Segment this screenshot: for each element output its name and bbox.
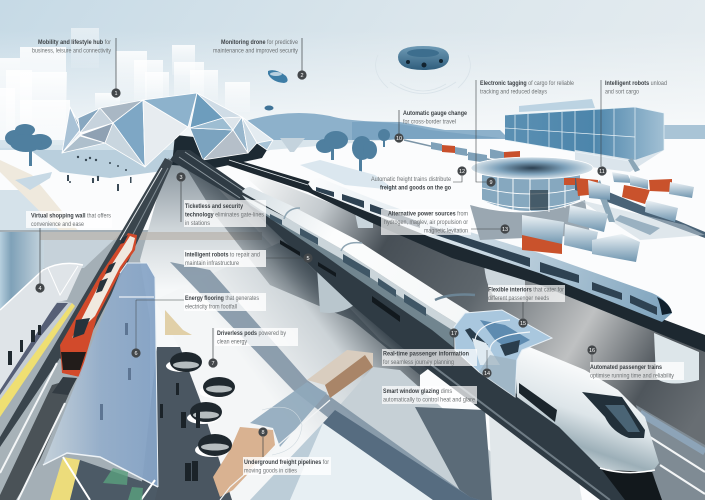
containers	[522, 172, 694, 262]
callout 15: flexible interiors: different passenger needs	[488, 295, 549, 302]
callout 2: monitoring drone: 2	[300, 73, 304, 79]
callout 3: ticketless: Ticketless and security	[185, 203, 243, 210]
freight pipeline	[213, 350, 373, 500]
roof	[242, 187, 519, 362]
shopping wall	[0, 263, 83, 390]
plaza shadow	[30, 150, 270, 178]
callout 5: intelligent robots repair: Intelligent robots to repair and	[185, 252, 260, 258]
windows	[270, 214, 426, 316]
callout 11: cargo robots: Intelligent robots unload	[605, 80, 667, 87]
callout 13: power sources: 13	[502, 227, 508, 233]
cut-away interior	[435, 295, 552, 397]
pod	[166, 352, 202, 372]
energy flooring tan marks	[165, 310, 192, 335]
funnel kiosk	[280, 138, 305, 152]
tree center	[352, 136, 377, 175]
callout 5: intelligent robots repair	[184, 250, 313, 267]
left rail track	[0, 158, 173, 500]
lifestyle hub tunnel	[172, 135, 270, 168]
distant hills	[246, 113, 705, 140]
callout 17: marker	[449, 328, 459, 349]
callout 10: gauge change: 10	[396, 136, 402, 142]
lower floor panels	[250, 367, 582, 500]
tree far	[378, 129, 390, 147]
train shadow patch	[52, 377, 77, 395]
callout 11: cargo robots	[597, 80, 667, 176]
callout 12: freight trains	[371, 166, 467, 192]
callout 2: monitoring drone: Monitoring drone for predictive	[221, 39, 298, 46]
crowd	[67, 156, 132, 191]
monitoring drone large	[376, 46, 470, 94]
side highlight	[242, 195, 519, 372]
big train pillar	[317, 268, 357, 313]
lifestyle hub	[62, 93, 273, 167]
train nose	[515, 341, 659, 472]
monitoring drone distant	[264, 106, 274, 110]
centre floor	[155, 240, 420, 500]
body side	[242, 195, 519, 395]
ground shadows under trees	[300, 160, 395, 190]
callout 3: ticketless	[176, 172, 266, 227]
callout 1: mobility hub: 1	[114, 91, 118, 97]
callout 12: freight trains: Automatic freight trains distribute	[371, 176, 451, 183]
callout 15: flexible interiors: Flexible interiors that cater for	[488, 286, 564, 294]
callout 1: mobility hub: Mobility and lifestyle hub for	[38, 39, 111, 46]
callout 9: electronic tagging	[476, 80, 574, 187]
lower right rails	[636, 405, 705, 500]
container yard	[522, 158, 705, 262]
callout 14: real-time information: Real-time passenger information	[383, 350, 469, 358]
callout 16: automated trains: Automated passenger trains	[590, 364, 662, 371]
callout 3: ticketless: technology eliminates gate-lines	[185, 212, 264, 218]
tree left	[5, 124, 52, 166]
callout 6: energy flooring: electricity from footfall	[185, 304, 237, 310]
callout 12: freight trains: 12	[459, 169, 465, 175]
circular freight terminal	[470, 157, 593, 240]
callout 15: flexible interiors: 15	[520, 321, 526, 327]
callout 7: driverless pods	[208, 328, 298, 368]
smart window glazing: Smart window glazing dims	[383, 388, 452, 395]
callout 13: power sources: magnetic levitation	[424, 228, 468, 234]
callout 2: monitoring drone	[213, 38, 307, 80]
roof rings	[284, 208, 300, 219]
pod	[195, 434, 232, 457]
upper train	[308, 178, 672, 322]
left district base	[0, 230, 150, 500]
callout 7: driverless pods: 7	[211, 361, 215, 367]
centre concourse strip	[140, 158, 285, 350]
blue block upper left	[0, 232, 44, 312]
callout 1: mobility hub	[32, 38, 121, 98]
callout 5: intelligent robots repair: 5	[306, 256, 310, 262]
pedestrians	[160, 383, 200, 481]
callout 14: real-time information: 14	[484, 371, 490, 377]
callout 10: gauge change: for cross-border travel	[403, 118, 456, 126]
callout 10: gauge change	[394, 110, 467, 143]
callout 13: power sources: hydrogen, maglev, air propulsion or	[384, 219, 468, 226]
monitoring drone small	[268, 70, 288, 83]
callout 15: flexible interiors	[488, 285, 565, 328]
callout 8: freight pipelines: Underground freight pipelines for	[244, 459, 329, 466]
callout 3: ticketless: in stations	[185, 220, 210, 227]
crossover bridge	[40, 232, 262, 240]
glass tube	[43, 263, 158, 500]
red train	[60, 233, 137, 377]
callout 9: electronic tagging: tracking and reduced delays	[480, 88, 547, 96]
callout 5: intelligent robots repair: maintain infrastructure	[185, 260, 239, 267]
callout 6: energy flooring: Energy flooring that generates	[185, 295, 259, 302]
callout 2: monitoring drone: maintenance and improved security	[213, 48, 299, 54]
big train guideway	[170, 150, 640, 500]
smart window glazing: automatically to control heat and glare	[383, 396, 475, 404]
callout 4: shopping wall: Virtual shopping wall that offers	[31, 212, 111, 220]
callout 7: driverless pods: Driverless pods powered by	[217, 330, 287, 337]
callout 13: power sources: Alternative power sources from	[388, 210, 468, 218]
callout 17: marker: 17	[451, 331, 457, 337]
pillars	[355, 213, 699, 384]
distant freight train	[404, 140, 520, 163]
tree right	[316, 131, 348, 160]
callout 12: freight trains: freight and goods on the go	[380, 184, 451, 192]
callout 4: shopping wall: 4	[38, 286, 42, 292]
trees	[5, 124, 390, 175]
callout 16: automated trains: 16	[589, 348, 595, 354]
callout 14: real-time information: for seamless journey planning	[383, 359, 454, 366]
callout 10: gauge change: Automatic gauge change	[403, 110, 467, 117]
callout 16: automated trains	[587, 345, 684, 380]
driverless pods	[166, 352, 235, 457]
callout 8: freight pipelines	[243, 427, 331, 475]
callout 3: ticketless: 3	[179, 175, 183, 181]
callout 1: mobility hub: business, leisure and connectivity	[32, 48, 112, 54]
callout 16: automated trains: optimise running time and reliability	[590, 372, 675, 380]
callout 7: driverless pods: clean energy	[217, 338, 248, 346]
callout 4: shopping wall: convenience and ease	[31, 221, 84, 228]
robot arm	[595, 180, 615, 222]
callout 13: power sources	[381, 209, 510, 235]
callout 14: real-time information	[382, 349, 492, 378]
diagonal blue band	[170, 262, 480, 500]
ground	[0, 139, 705, 500]
pod pavement	[140, 347, 232, 500]
callout 6: energy flooring: 6	[134, 351, 138, 357]
callout 4: shopping wall	[26, 211, 112, 293]
callout 6: energy flooring	[131, 293, 266, 358]
callout 11: cargo robots: and sort cargo	[605, 88, 639, 96]
upper guideway	[227, 157, 705, 352]
city skyline	[0, 28, 250, 157]
dark corridor	[178, 155, 460, 375]
callout 11: cargo robots: 11	[599, 169, 605, 175]
callout 9: electronic tagging: Electronic tagging of cargo for reliable	[480, 80, 574, 87]
area between guideways	[232, 165, 705, 500]
callout 8: freight pipelines: 8	[261, 430, 265, 436]
glass cargo building	[505, 99, 664, 172]
big train	[242, 187, 662, 500]
callout 9: electronic tagging: 9	[489, 180, 493, 186]
callout 8: freight pipelines: moving goods in cities	[244, 468, 297, 474]
smart window glazing	[382, 386, 477, 404]
pod	[187, 402, 222, 424]
left platform	[0, 300, 75, 417]
pod	[199, 377, 235, 398]
